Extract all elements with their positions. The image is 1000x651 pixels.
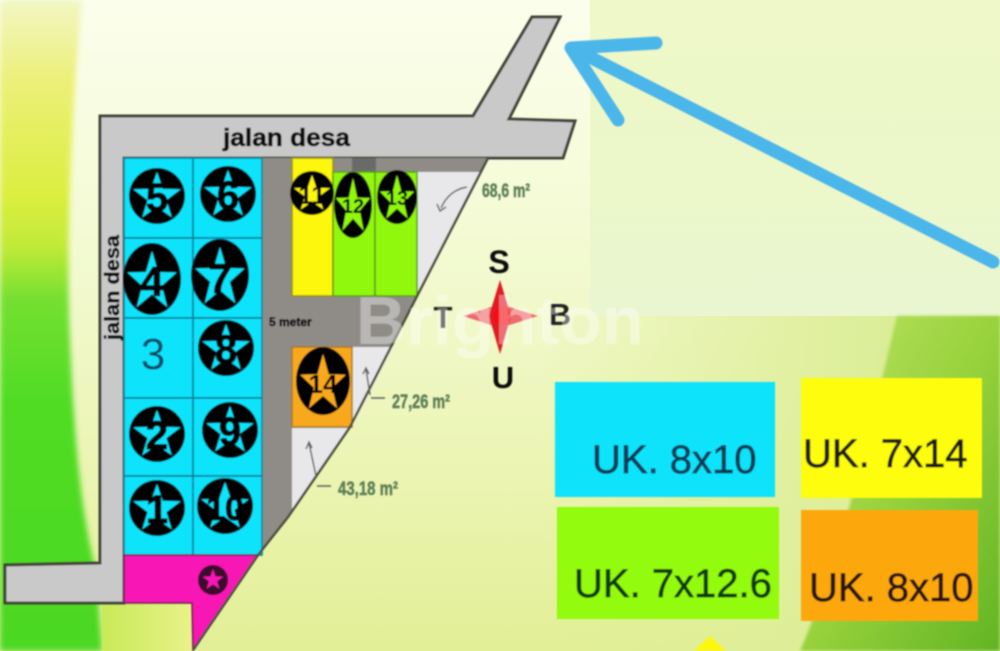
- compass: B: B: [549, 297, 571, 332]
- lot 1: [129, 480, 185, 536]
- legend: orange: UK. 8x10: [809, 566, 974, 610]
- lot 6: [200, 166, 256, 222]
- lot 13: 13: [386, 188, 408, 210]
- callout: 27,26 m2: [363, 368, 450, 413]
- lot 1: 1: [146, 488, 168, 532]
- lot 5: 5: [146, 176, 168, 220]
- lot 6: 6: [217, 174, 239, 218]
- callout: 43,18 m2: [306, 442, 398, 500]
- compass: T: T: [434, 300, 453, 335]
- compass star: [463, 280, 538, 354]
- lot 12: [334, 172, 372, 238]
- site plan: [5, 17, 575, 650]
- arrow: [571, 43, 993, 262]
- top service strip: [352, 158, 376, 172]
- callout: 68,6 m2: 68,6 m²: [482, 181, 530, 202]
- green lots: [333, 172, 417, 296]
- lot 2: 2: [146, 414, 168, 458]
- lot 12: 12: [342, 196, 364, 218]
- label: jalan desa vertical: jalan desa: [102, 234, 124, 341]
- light plot: 27,26 m2: [352, 347, 393, 427]
- lot 3: 3: [141, 330, 165, 379]
- callout: 43,18 m2: 43,18 m²: [338, 479, 398, 500]
- legend: green: UK. 7x12.6: [574, 562, 772, 606]
- yellow lot: [292, 158, 333, 296]
- lot 14: [296, 347, 350, 415]
- orange lot: [292, 347, 352, 427]
- diagonal boundary: [193, 158, 488, 650]
- legend: orange: [801, 510, 978, 621]
- legend: yellow: [801, 378, 982, 498]
- compass: S: S: [488, 244, 510, 280]
- yellow triangle marker: [694, 636, 726, 651]
- cyan lots: [124, 158, 262, 555]
- callout: 27,26 m2: 27,26 m²: [392, 392, 450, 413]
- legend: cyan: UK. 8x10: [592, 438, 757, 482]
- pink lot star: [198, 565, 228, 595]
- road: jalan desa: [5, 17, 575, 603]
- lot 7: 7: [208, 255, 232, 302]
- compass: [434, 244, 571, 395]
- legend: green: [557, 507, 779, 619]
- lot 11: [290, 171, 334, 215]
- light plot: 43,18 m2: [292, 428, 350, 510]
- label: jalan desa horizontal: jalan desa: [222, 124, 351, 152]
- lot 9: [202, 402, 258, 458]
- legend: cyan: [555, 382, 775, 497]
- lot 5: [129, 168, 185, 224]
- lot 11: 11: [298, 180, 326, 210]
- compass: U: U: [492, 360, 514, 395]
- inner gray lane: [258, 158, 488, 555]
- lot 14: 14: [309, 369, 338, 399]
- light plot: 68,6 m2: [417, 172, 481, 296]
- legend: [555, 378, 982, 621]
- lot 8: 8: [215, 328, 237, 372]
- label: 5 meter: 5 meter: [269, 315, 312, 329]
- watermark: Brighton: [356, 283, 644, 359]
- lot 4: 4: [140, 258, 164, 305]
- lot 4: [123, 243, 181, 315]
- lot 9: 9: [219, 410, 241, 454]
- lot 10: 10: [206, 490, 244, 528]
- lot 2: [129, 406, 185, 462]
- lot 13: [377, 170, 417, 224]
- lot 10: [197, 478, 253, 534]
- lot 8: [198, 320, 254, 376]
- lot 7: [191, 239, 249, 311]
- callout: 68,6 m2: [437, 181, 530, 211]
- legend: yellow: UK. 7x14: [803, 432, 968, 476]
- magenta lots: [124, 555, 258, 650]
